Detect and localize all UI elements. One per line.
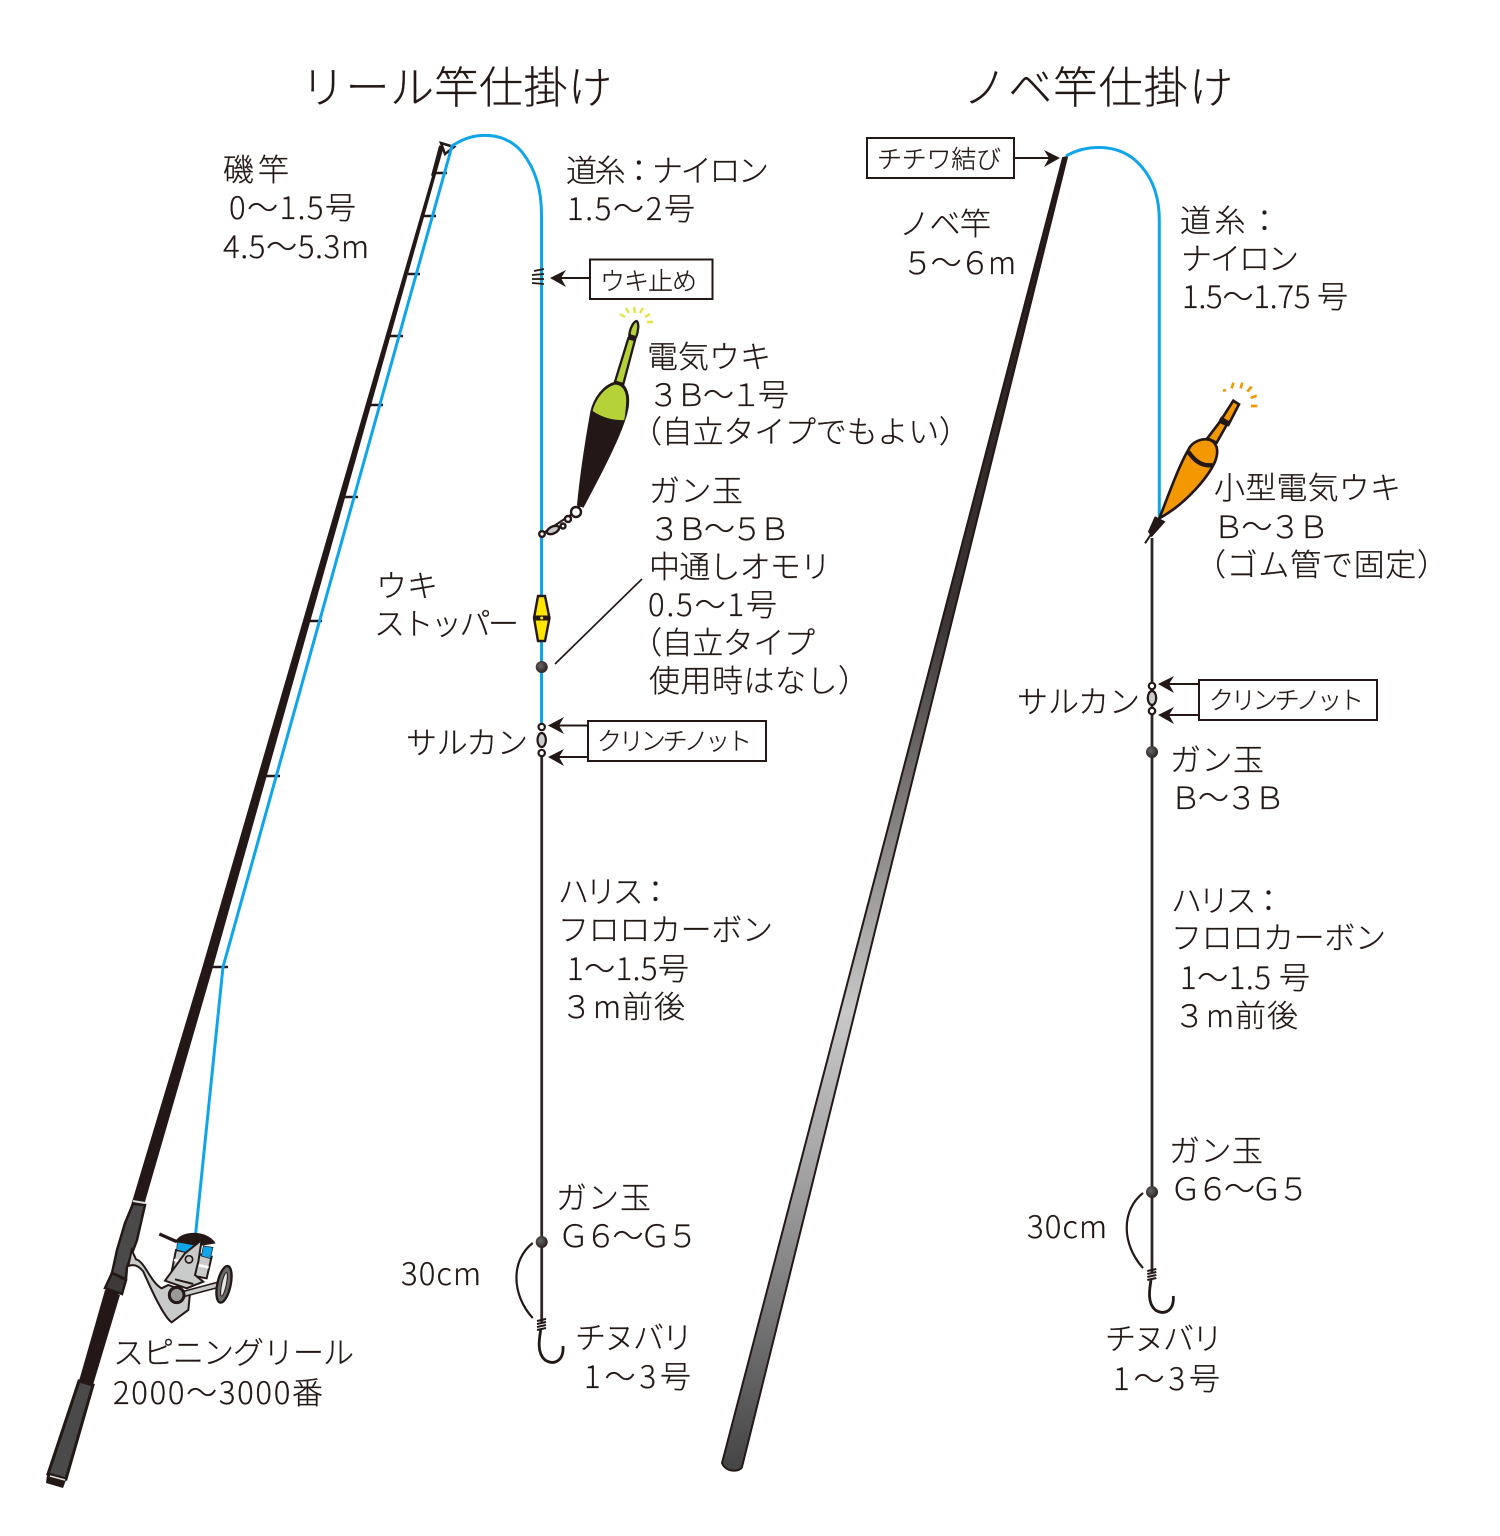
label: leader xyxy=(558,867,773,1027)
lower rod section xyxy=(79,1290,120,1385)
label: small electric float xyxy=(1195,463,1448,585)
icon: spinning reel xyxy=(128,1233,234,1322)
collar xyxy=(105,1273,126,1294)
label: electric float: （自立タイプでもよい） xyxy=(631,407,970,452)
label: electric float xyxy=(631,332,970,452)
label: leader: フロロカーボン xyxy=(558,905,773,950)
label: main line: 道糸：ナイロン xyxy=(566,146,769,191)
label: sinker xyxy=(631,466,869,701)
label: hook: チヌバリ xyxy=(575,1313,693,1358)
label: swivel: サルカン xyxy=(1017,677,1140,722)
label: split shot xyxy=(556,1173,698,1256)
label: hook: 1～3号 xyxy=(1113,1354,1220,1399)
label: leader: ハリス： xyxy=(1171,876,1284,921)
main line: pole rod xyxy=(1066,147,1159,518)
label: hook: 1～3号 xyxy=(584,1352,691,1397)
label: pole spec xyxy=(899,199,1016,283)
label: electric float: 電気ウキ xyxy=(647,332,771,377)
label: main line: 道糸： xyxy=(1180,196,1280,241)
label: leader: ハリス： xyxy=(558,867,671,912)
label: main line: ナイロン xyxy=(1181,234,1299,279)
terminal tackle: reel rod xyxy=(516,1236,563,1362)
label: small electric float: 小型電気ウキ xyxy=(1214,463,1401,508)
butt cap xyxy=(46,1475,66,1488)
icon: float stopper xyxy=(534,596,550,641)
leader line: sinker note xyxy=(555,579,642,664)
title: reel rod rig: リール竿仕掛け xyxy=(301,52,612,116)
icon: float swivel xyxy=(539,505,581,537)
label: main line xyxy=(1180,196,1348,317)
label: pole spec: ノベ竿 xyxy=(899,199,991,244)
label: float stopper: ストッパー xyxy=(374,599,519,644)
label: rod spec: 4.5～5.3m xyxy=(223,222,369,267)
label: rod spec: 磯竿 xyxy=(223,145,289,190)
callout: clinch knot xyxy=(1158,676,1377,724)
label: sinker: ３Ｂ～５Ｂ xyxy=(649,504,790,549)
icon: swivel xyxy=(538,724,546,756)
icon: through sinker xyxy=(536,661,548,673)
fore grip xyxy=(112,1204,145,1279)
label: main line: 1.5～1.75 号 xyxy=(1182,272,1348,317)
label: float stopper: ウキ xyxy=(376,561,438,606)
label: 30cm: 30cm xyxy=(1027,1202,1107,1247)
icon: small electric float xyxy=(1145,383,1257,543)
pole rod xyxy=(722,157,1067,1471)
label: swivel: サルカン xyxy=(406,718,528,763)
label: main line xyxy=(566,146,769,229)
leader: pole rod xyxy=(1151,538,1153,1272)
label: split shot: Ｇ６～Ｇ５ xyxy=(1170,1164,1309,1209)
label: electric float: ３Ｂ～１号 xyxy=(648,370,789,415)
main line: reel rod xyxy=(195,135,542,1240)
label: float stopper xyxy=(374,561,519,644)
callout: loop knot: チチワ結び xyxy=(877,140,1001,176)
label: spinning reel: スピニングリール xyxy=(113,1328,354,1373)
callout: float stop xyxy=(550,260,712,299)
label: sinker: 0.5～1号 xyxy=(648,580,777,625)
callout: clinch knot xyxy=(548,717,766,766)
label: leader: 1～1.5号 xyxy=(567,944,689,989)
terminal tackle: pole rod xyxy=(1127,1186,1173,1312)
label: rod spec: 0～1.5号 xyxy=(229,183,356,228)
label: leader: フロロカーボン xyxy=(1171,913,1386,958)
icon: electric float xyxy=(577,307,653,507)
callout: float stop: ウキ止め xyxy=(600,262,697,298)
callout: clinch knot: クリンチノット xyxy=(597,722,752,758)
label: sinker: 使用時はなし） xyxy=(649,656,869,701)
callout: loop knot xyxy=(867,138,1060,178)
label: sinker: ガン玉 xyxy=(649,466,743,511)
label: sinker: ガン玉 xyxy=(1170,735,1264,780)
label: sinker: （自立タイプ xyxy=(631,618,815,663)
title: pole rod rig: ノベ竿仕掛け xyxy=(963,52,1233,116)
label: split shot: ガン玉 xyxy=(1169,1126,1263,1171)
reel rod with guides xyxy=(46,143,454,1488)
label: split shot: Ｇ６～Ｇ５ xyxy=(558,1211,698,1256)
label: sinker: 中通しオモリ xyxy=(649,542,831,587)
icon: split shot xyxy=(1146,746,1158,758)
icon: swivel xyxy=(1148,683,1156,714)
label: leader: ３m前後 xyxy=(1174,991,1298,1036)
label: split shot: ガン玉 xyxy=(556,1173,651,1218)
label: hook xyxy=(575,1313,693,1397)
label: spinning reel xyxy=(113,1328,354,1413)
label: leader: 1～1.5 号 xyxy=(1180,953,1310,998)
label: split shot xyxy=(1169,1126,1309,1209)
label: sinker xyxy=(1170,735,1285,818)
icon: float stop knot xyxy=(532,269,544,284)
label: rod spec xyxy=(223,145,369,267)
label: sinker: Ｂ～３Ｂ xyxy=(1170,773,1285,818)
label: leader: ３m前後 xyxy=(561,982,685,1027)
label: hook xyxy=(1105,1314,1223,1399)
label: 30cm: 30cm xyxy=(401,1249,481,1294)
butt grip xyxy=(48,1381,93,1479)
label: hook: チヌバリ xyxy=(1105,1314,1223,1359)
label: small electric float: Ｂ～３Ｂ xyxy=(1213,502,1329,547)
label: small electric float: （ゴム管で固定） xyxy=(1195,540,1448,585)
label: main line: 1.5～2号 xyxy=(567,184,695,229)
leader: reel rod xyxy=(540,753,543,1322)
callout: clinch knot: クリンチノット xyxy=(1209,681,1364,717)
label: leader xyxy=(1171,876,1386,1036)
label: pole spec: ５～６m xyxy=(902,238,1016,283)
label: spinning reel: 2000～3000番 xyxy=(113,1368,323,1413)
